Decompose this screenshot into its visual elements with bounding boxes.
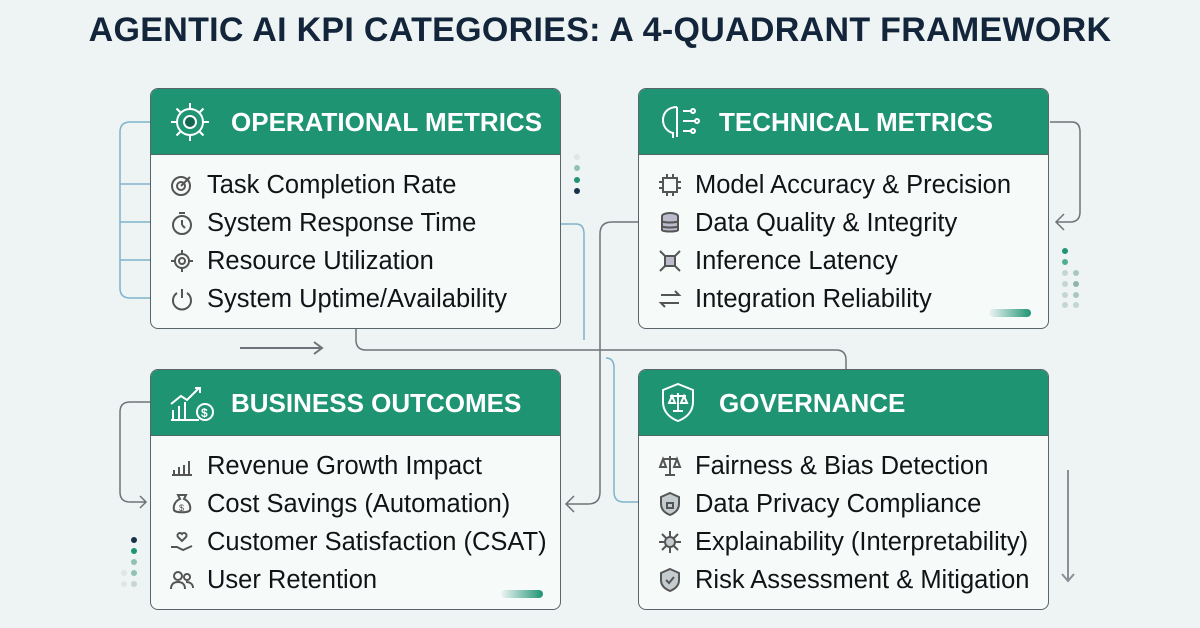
panel: business outcomes: Cost Savings (Automation)	[207, 490, 510, 518]
header: operational: OPERATIONAL METRICS	[231, 107, 542, 137]
header: governance: GOVERNANCE	[719, 388, 905, 418]
panel: technical metrics	[638, 88, 1049, 329]
panel: operational metrics: System Response Time	[207, 208, 476, 236]
panel: technical metrics: Inference Latency	[695, 246, 898, 274]
panel: technical metrics: Data Quality & Integrity	[695, 208, 957, 236]
header: business: BUSINESS OUTCOMES	[231, 388, 521, 418]
panel: operational metrics: System Uptime/Availability	[207, 284, 507, 312]
panel: governance	[638, 369, 1049, 610]
panel: governance: Fairness & Bias Detection	[695, 452, 988, 480]
progress accent	[501, 590, 543, 598]
panel: governance: Risk Assessment & Mitigation	[695, 566, 1029, 594]
header: governance	[639, 370, 1048, 436]
header: technical	[639, 89, 1048, 155]
panel: governance: Data Privacy Compliance	[695, 490, 981, 518]
panel: operational metrics	[150, 88, 561, 329]
item list	[170, 452, 547, 598]
panel: technical metrics: Integration Reliability	[695, 284, 932, 312]
header: operational	[151, 89, 560, 155]
panel: business outcomes: Revenue Growth Impact	[207, 452, 482, 480]
panel: operational metrics: Task Completion Rate	[207, 170, 456, 198]
panel: operational metrics: Resource Utilization	[207, 246, 434, 274]
panel: technical metrics: Model Accuracy & Precision	[695, 170, 1011, 198]
item list	[658, 452, 1029, 594]
progress accent	[989, 309, 1031, 317]
panel: business outcomes	[150, 369, 561, 610]
title: AGENTIC AI KPI CATEGORIES: A 4-QUADRANT FRAMEWORK	[89, 11, 1111, 49]
header: business: $	[201, 406, 208, 420]
panel: business outcomes: Customer Satisfaction (CSAT)	[207, 528, 547, 556]
panel: governance: Explainability (Interpretability)	[695, 528, 1028, 556]
header: technical: TECHNICAL METRICS	[719, 107, 993, 137]
panel: business outcomes: $	[179, 503, 184, 513]
item list	[658, 170, 1031, 317]
header: business	[151, 370, 560, 436]
item list	[171, 170, 507, 312]
panel: business outcomes: User Retention	[207, 566, 377, 594]
